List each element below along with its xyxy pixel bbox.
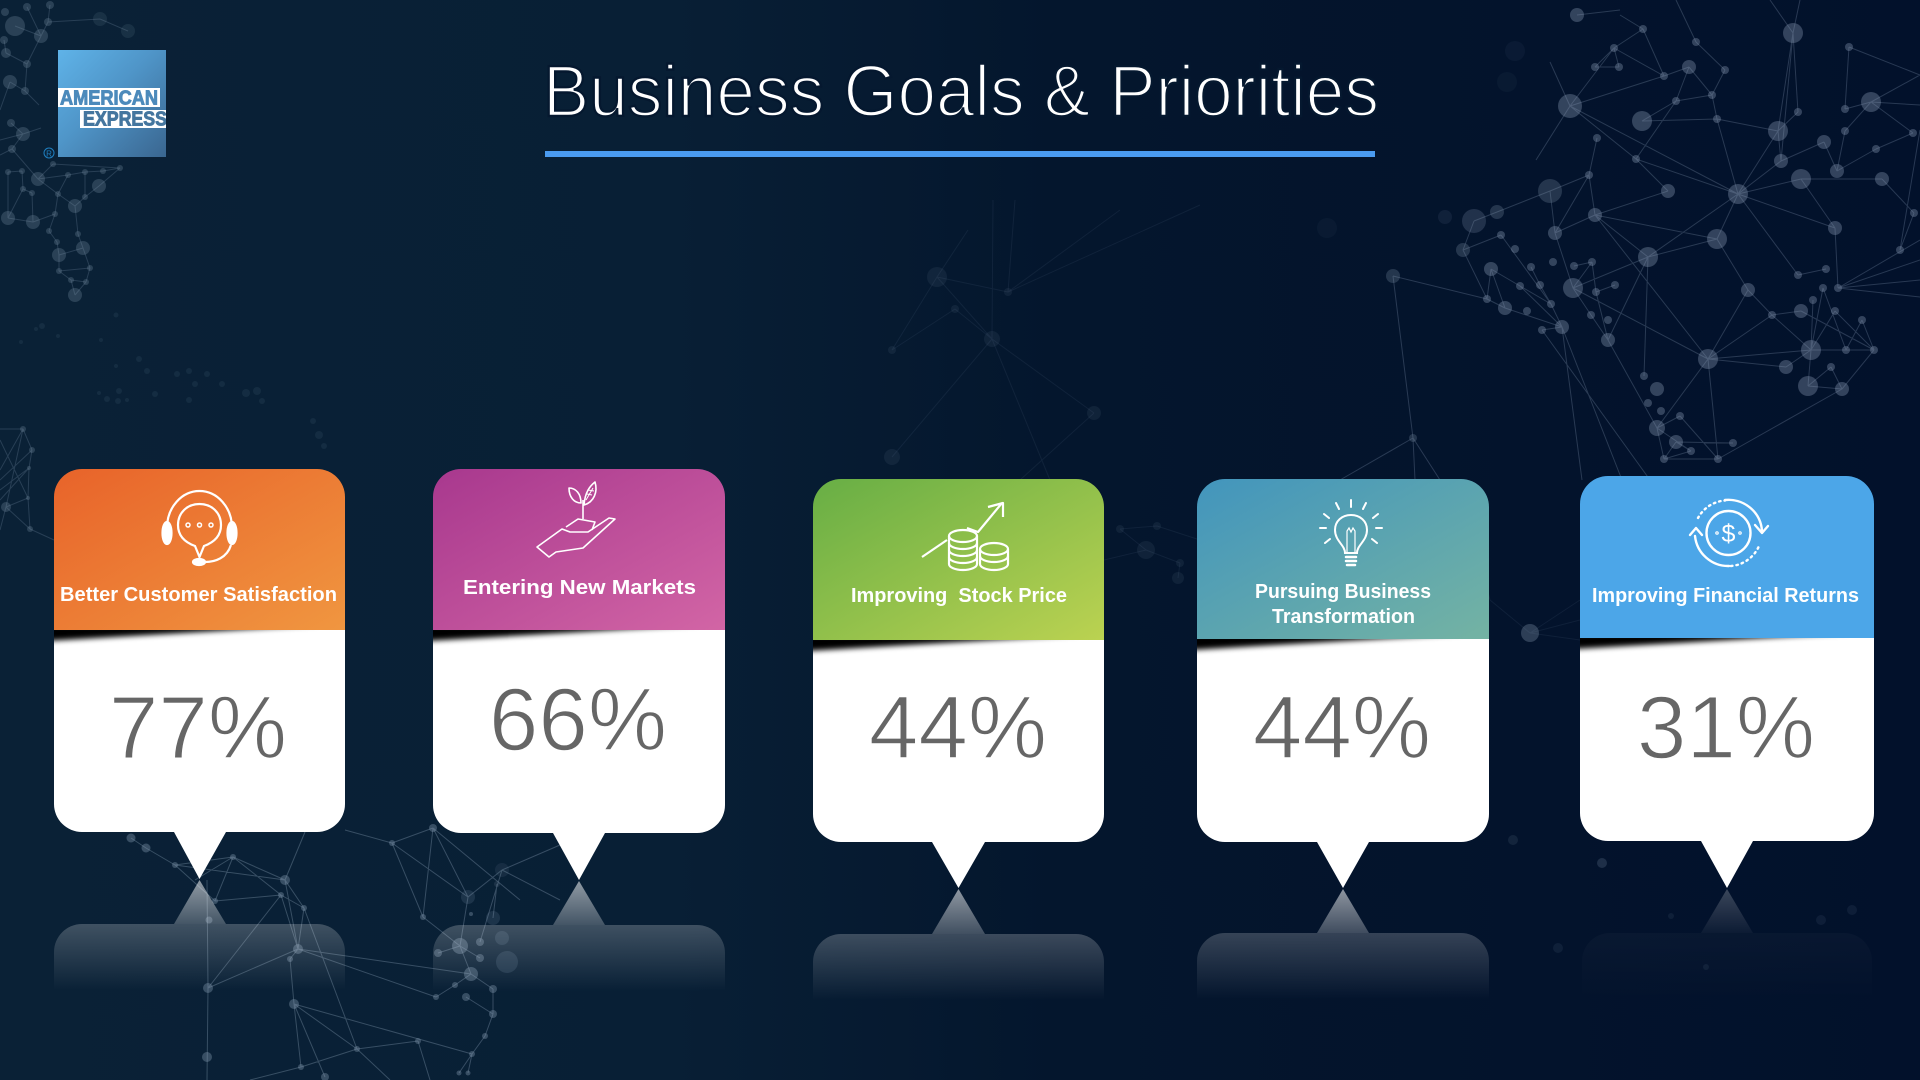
speech bubble body xyxy=(433,630,725,880)
label: Transformation xyxy=(1272,606,1415,628)
header shadow xyxy=(1197,639,1447,654)
label: Improving Financial Returns xyxy=(1592,585,1859,607)
card: Better Customer Satisfaction xyxy=(30,469,345,990)
registered mark xyxy=(44,148,54,158)
value: 77% xyxy=(109,677,287,777)
network: upper right xyxy=(1317,0,1920,480)
header xyxy=(1580,476,1874,638)
title underline xyxy=(545,151,1375,157)
icon: headset with chat bubble xyxy=(162,491,236,565)
reflection xyxy=(433,881,725,991)
value: 44% xyxy=(1253,677,1431,777)
logo: American Express xyxy=(58,50,168,157)
reflection xyxy=(813,889,1104,1000)
value: 44% xyxy=(869,677,1047,777)
title: Business Goals & Priorities xyxy=(543,52,1379,132)
speech bubble body xyxy=(813,640,1104,888)
speech bubble body xyxy=(1580,638,1874,888)
label: Better Customer Satisfaction xyxy=(60,584,337,606)
logo wordmark: EXPRESS: EXPRESS xyxy=(83,108,167,130)
label: Improving Stock Price xyxy=(851,585,1067,607)
header shadow xyxy=(813,640,1063,656)
logo wordmark: AMERICAN: AMERICAN xyxy=(60,88,158,110)
speech bubble body xyxy=(54,630,345,879)
reflection xyxy=(54,880,345,990)
card: Entering New Markets xyxy=(409,469,725,991)
header shadow xyxy=(433,630,683,646)
network: upper left xyxy=(0,1,327,540)
card: Improving Financial Returns xyxy=(1580,476,1874,933)
icon: rising coins xyxy=(922,503,1008,570)
card: Pursuing Business Transformation xyxy=(1173,479,1489,999)
header shadow xyxy=(1580,638,1832,654)
icon: plant in hand xyxy=(537,482,615,557)
network: bottom left xyxy=(126,824,560,1080)
label xyxy=(1255,581,1431,628)
header xyxy=(433,469,725,630)
reflection xyxy=(1197,889,1489,999)
header shadow xyxy=(54,630,303,645)
registered mark: R xyxy=(46,150,52,158)
icon: dollar cycle: $ xyxy=(1722,520,1736,548)
header xyxy=(813,479,1104,640)
reflection xyxy=(1582,889,1872,1000)
value: 31% xyxy=(1637,677,1815,777)
header xyxy=(54,469,345,630)
value: 66% xyxy=(489,669,667,769)
icon: dollar cycle xyxy=(1690,500,1768,566)
label: Pursuing Business xyxy=(1255,581,1431,603)
icon: light bulb xyxy=(1320,500,1382,565)
header xyxy=(1197,479,1489,639)
network: centre xyxy=(884,200,1857,970)
card: Improving Stock Price xyxy=(789,479,1104,1000)
label: Entering New Markets xyxy=(463,577,696,599)
speech bubble body xyxy=(1197,639,1489,888)
